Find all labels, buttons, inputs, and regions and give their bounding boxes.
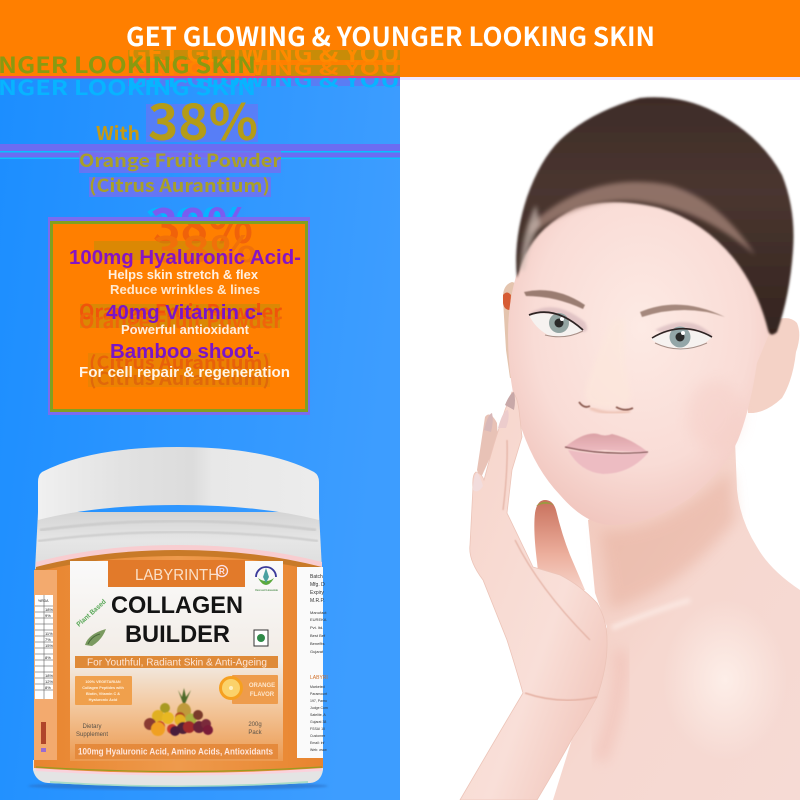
- panel: blue left column: [0, 78, 400, 800]
- pack info text: Dietary: [82, 724, 102, 730]
- product jar: [28, 447, 328, 790]
- left brow: [524, 290, 585, 309]
- pack info text: Pack: [248, 730, 263, 736]
- ingredients side panel: Batch: [310, 574, 323, 580]
- orange label: [34, 551, 323, 773]
- pack info text: [76, 722, 263, 738]
- text block: 38% orange fruit powder: 38%: [148, 83, 258, 155]
- ingredients side panel: Satelite, A: [310, 713, 326, 717]
- icon: certification logo: [255, 567, 279, 592]
- text block: 38% orange fruit powder: Orange Fruit Powder: [79, 147, 281, 173]
- ghosted repeated heading: [0, 50, 400, 96]
- text: vitamin c: 40mg Vitamin c-: [106, 302, 263, 324]
- front white panel: [70, 561, 283, 761]
- text block: 38% orange fruit powder: (Citrus Aurantium): [89, 172, 270, 198]
- ghosted repeated heading: NGER LOOKING SKIN: [0, 48, 256, 80]
- nutrition side panel: [34, 570, 57, 760]
- ingredients side panel: Benefits: [310, 641, 324, 646]
- lips: [565, 434, 648, 474]
- nutrition side panel: 15%: [45, 643, 53, 648]
- brand badge: LABYRINTH: [135, 567, 219, 584]
- text: vitamin c: [106, 302, 263, 337]
- ingredients side panel: Gujarat: [310, 649, 324, 654]
- hair: [516, 97, 794, 335]
- left ear: [503, 282, 522, 378]
- bottom claim band: [75, 744, 278, 759]
- ghost text inside box: (Citrus Aurantium): [89, 349, 270, 375]
- brand badge: R: [219, 567, 225, 576]
- nutrition side panel: 11%: [45, 631, 53, 636]
- nutrition side panel: %RDA: [38, 599, 49, 603]
- jar base: [33, 760, 323, 786]
- neck and shoulder: [553, 440, 800, 800]
- ingredients side panel: Expiry: [310, 590, 324, 596]
- ghost 38% above box: [148, 207, 242, 217]
- ingredients side panel: FSSAI 10: [310, 727, 325, 731]
- fruit pile: [144, 688, 213, 736]
- ingredients side panel: Paramount: [310, 692, 327, 696]
- panel: orange ingredient box: [48, 217, 310, 415]
- stripes across left column: [0, 144, 400, 159]
- ingredients side panel: [297, 567, 328, 758]
- text: hyaluronic acid: [69, 247, 301, 297]
- nutrition side panel: 12%: [45, 679, 53, 684]
- ingredients badge: 100% VEGETARIAN: [85, 680, 121, 684]
- orange flavor badge: FLAVOR: [250, 692, 275, 698]
- header banner: [0, 0, 800, 80]
- ingredients badge: Biotin, Vitamin C &: [86, 692, 120, 696]
- woman portrait: [460, 97, 800, 800]
- ingredients badge: [75, 676, 132, 705]
- ghost text inside box: (Citrus Aurantium): [89, 365, 270, 391]
- brand badge: [108, 560, 245, 587]
- ingredients side panel: Marketed: [310, 685, 325, 689]
- right brow: [640, 305, 725, 317]
- middle finger: [477, 415, 498, 480]
- face: [508, 185, 775, 525]
- text block: 38% orange fruit powder: With: [96, 119, 140, 146]
- icon: veg mark: [254, 630, 268, 646]
- right ear: [745, 318, 799, 413]
- ghost text inside box: Orange Fruit Powder: [79, 296, 282, 325]
- icon: bamboo leaf: [85, 629, 106, 646]
- tagline band: For Youthful, Radiant Skin & Anti-Ageing: [87, 656, 267, 668]
- nutrition side panel: 8%: [45, 655, 51, 660]
- ingredients side panel: 197, Pamo: [310, 699, 327, 703]
- palm and fingers: [460, 392, 607, 800]
- ingredients side panel: M.R.P.: [310, 598, 325, 604]
- ghosted repeated heading: GET GLOWING & YOU: [128, 34, 400, 69]
- jar lid: [38, 447, 319, 520]
- ingredients side panel: EUREKA: [310, 617, 327, 622]
- ghost text inside box: 38%: [153, 221, 257, 273]
- ghosted repeated heading: GET GLOWING & YOU: [128, 55, 400, 81]
- nose: [579, 320, 633, 413]
- ingredients side panel: Email: inf: [310, 741, 324, 745]
- nutrition side panel: 18%: [45, 607, 53, 612]
- ingredients side panel: Gujarat 38: [310, 720, 326, 724]
- ghost 38% above box: 38%: [150, 187, 253, 257]
- bottom claim band: 100mg Hyaluronic Acid, Amino Acids, Antioxidants: [78, 746, 273, 756]
- hair highlight: [520, 182, 755, 270]
- jar shadow: [28, 782, 328, 790]
- ingredients side panel: Judge Com: [310, 706, 328, 710]
- ghost text inside box: 38%: [153, 187, 253, 257]
- ingredients side panel: Manufact: [310, 610, 327, 615]
- plant based tag: Plant Based: [76, 599, 108, 628]
- product name: COLLAGEN: [111, 592, 243, 619]
- text block: 38% orange fruit powder: [79, 83, 281, 198]
- jar neck: [35, 512, 322, 570]
- product name: [111, 592, 243, 648]
- text: bamboo shoot: Bamboo shoot-: [110, 341, 260, 363]
- text: bamboo shoot: [79, 341, 290, 381]
- nutrition side panel: 18%: [45, 673, 53, 678]
- ghost text inside box: Orange Fruit Powder: [79, 305, 282, 334]
- right eye: [651, 322, 712, 350]
- pack info text: Supplement: [76, 732, 108, 738]
- nutrition side panel: 7%: [45, 637, 51, 642]
- left eye: [529, 307, 587, 337]
- nails: [473, 472, 483, 491]
- orange flavor badge: [219, 675, 278, 704]
- ghosted repeated heading: GET GLOWING & YOU: [128, 64, 400, 93]
- ghost 38% above box: 38%: [145, 187, 248, 257]
- text: hyaluronic acid: Reduce wrinkles & lines: [110, 282, 260, 297]
- text: vitamin c: Powerful antioxidant: [121, 322, 250, 337]
- ingredients side panel: Web: www: [310, 748, 327, 752]
- text: bamboo shoot: For cell repair & regeneration: [79, 364, 290, 381]
- icon: certification logo: Paramount Nutraceuticals: [255, 589, 279, 592]
- ingredients side panel: Best Bef: [310, 633, 326, 638]
- ingredients side panel: Customer: [310, 734, 326, 738]
- nutrition side panel: 8%: [45, 685, 51, 690]
- ingredients badge: Hyaluronic Acid: [89, 698, 118, 702]
- text: hyaluronic acid: Helps skin stretch & flex: [108, 267, 259, 282]
- thumb: [534, 500, 585, 590]
- ingredients badge: Collagen Peptides with: [82, 686, 124, 690]
- nutrition side panel: 9%: [45, 613, 51, 618]
- title: GET GLOWING & YOUNGER LOOKING SKIN: [126, 17, 655, 54]
- orange flavor badge: ORANGE: [249, 683, 275, 689]
- ghosted repeated heading: NGER LOOKING SKIN: [0, 72, 256, 101]
- product name: BUILDER: [125, 621, 230, 648]
- ingredients side panel: Pvt. ltd.: [310, 625, 323, 630]
- pack info text: 200g: [248, 722, 262, 728]
- ingredients side panel: LABYRI: [310, 675, 328, 681]
- ghost text inside box: [80, 224, 282, 388]
- text: hyaluronic acid: 100mg Hyaluronic Acid-: [69, 247, 301, 269]
- hand: [460, 392, 607, 800]
- cheek blush: [687, 380, 743, 450]
- ingredients side panel: Mfg. D: [310, 582, 325, 588]
